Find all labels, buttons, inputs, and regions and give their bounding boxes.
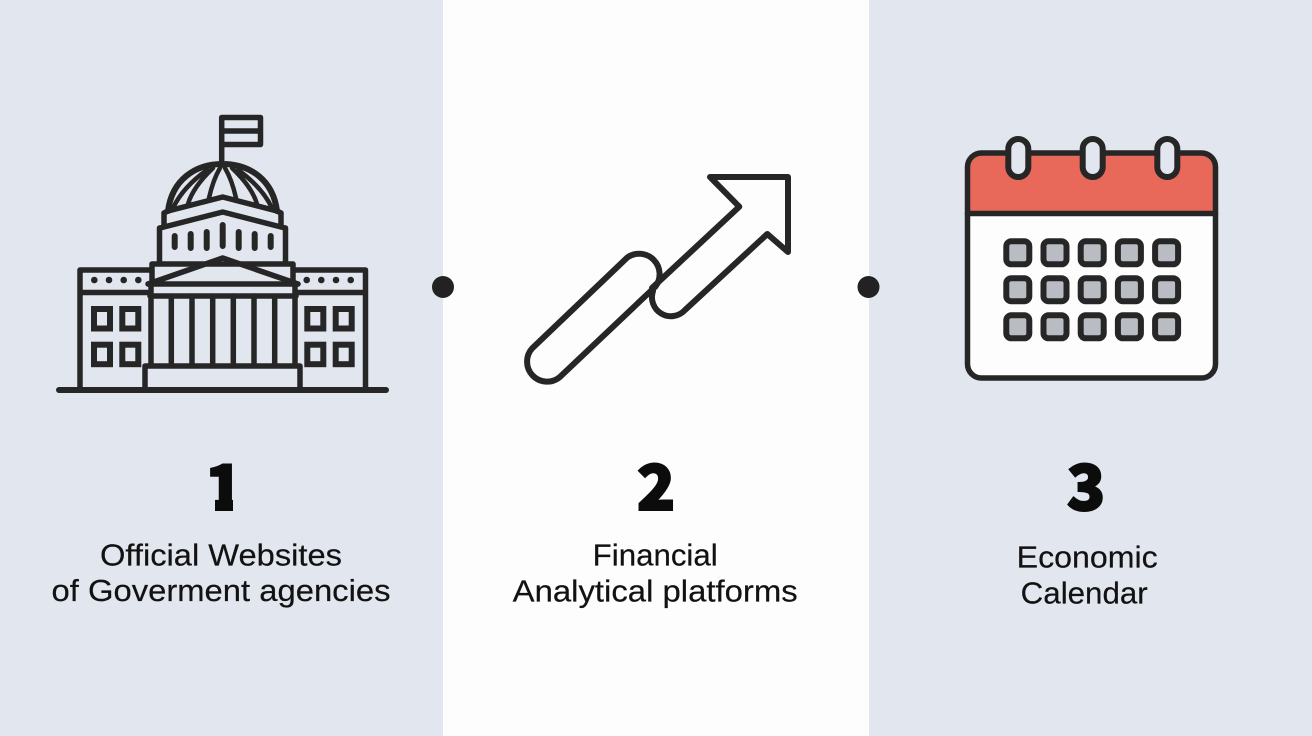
icon: capitol building xyxy=(59,118,386,390)
icon: rising arrow xyxy=(527,177,788,382)
label: financial platforms: Analytical platforms xyxy=(513,574,798,608)
number 1: 1 xyxy=(205,438,243,529)
connector dot left xyxy=(432,276,454,298)
label: official websites: of Goverment agencies xyxy=(52,573,390,608)
label: economic calendar: Economic xyxy=(1017,540,1158,574)
number 3: 3 xyxy=(1067,438,1105,529)
icon: calendar xyxy=(968,139,1216,378)
panel: financial platforms xyxy=(443,0,869,736)
label: official websites: Official Websites xyxy=(100,538,342,572)
panel: government websites xyxy=(52,114,390,608)
panel: economic calendar xyxy=(869,0,1312,736)
number 2: 2 xyxy=(637,438,675,529)
label: financial platforms: Financial xyxy=(593,538,718,572)
connector dot right xyxy=(858,276,880,298)
label: economic calendar: Calendar xyxy=(1021,576,1148,610)
